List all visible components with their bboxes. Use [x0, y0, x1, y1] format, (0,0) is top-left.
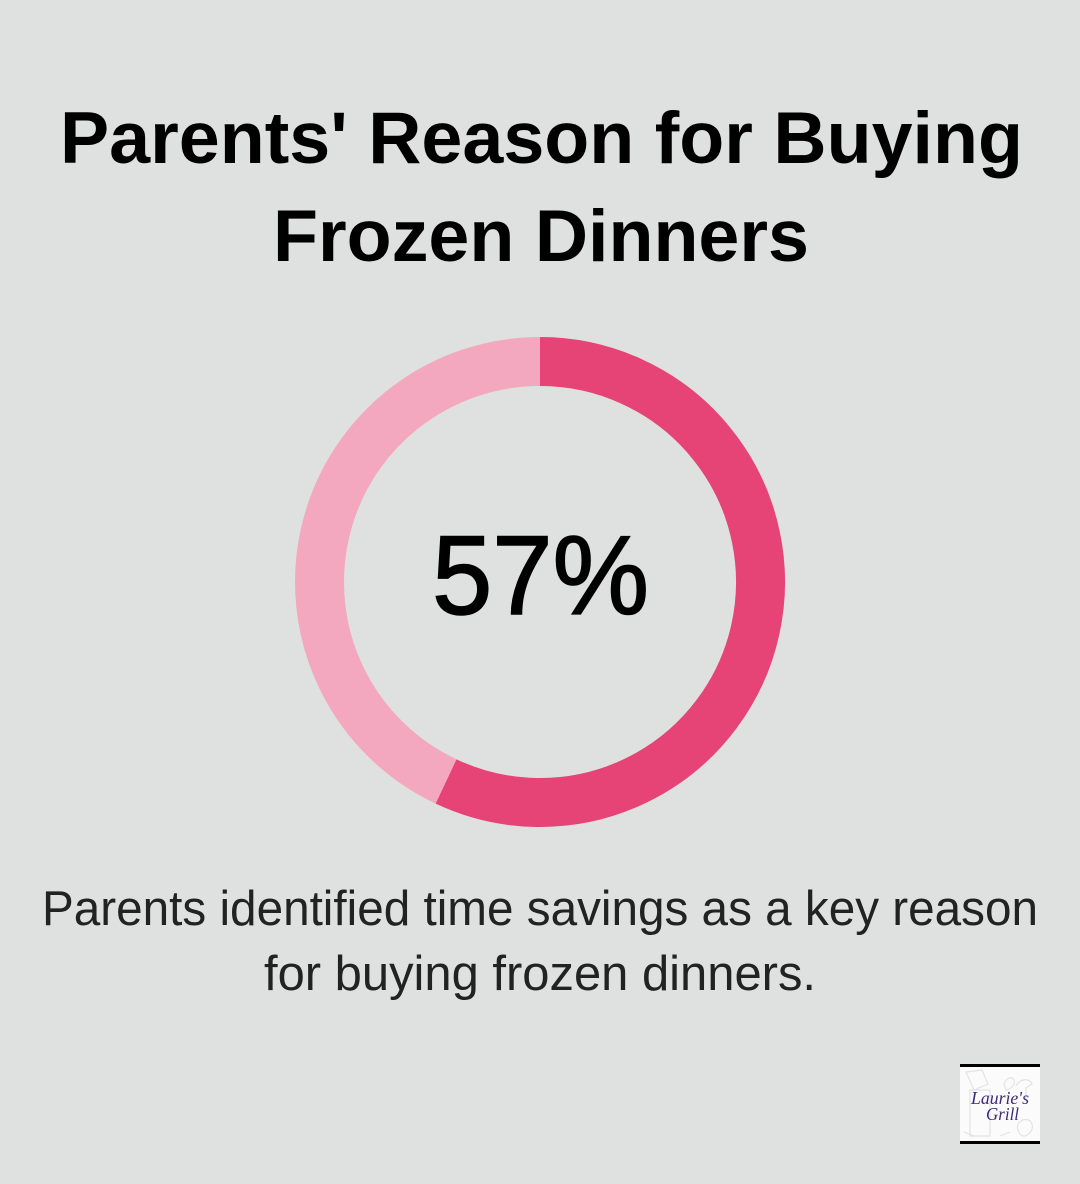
description text — [42, 882, 1038, 1001]
logo sketch decoration — [964, 1070, 1032, 1136]
title: Parents' Reason for Buying — [60, 98, 1023, 179]
title: Frozen Dinners — [273, 196, 809, 277]
title — [60, 98, 1023, 277]
donut remainder segment — [320, 362, 540, 782]
donut highlighted segment — [446, 362, 761, 803]
logo bottom bar — [960, 1141, 1040, 1144]
donut chart: 57% — [320, 362, 761, 803]
logo text: Laurie's — [970, 1088, 1029, 1108]
center value: 57% — [432, 513, 649, 638]
description text: for buying frozen dinners. — [264, 947, 816, 1001]
logo text — [970, 1088, 1029, 1124]
logo top bar — [960, 1064, 1040, 1067]
description text: Parents identified time savings as a key reason — [42, 882, 1038, 936]
logo text: Grill — [986, 1104, 1019, 1124]
logo: Laurie's Grill — [960, 1064, 1040, 1144]
